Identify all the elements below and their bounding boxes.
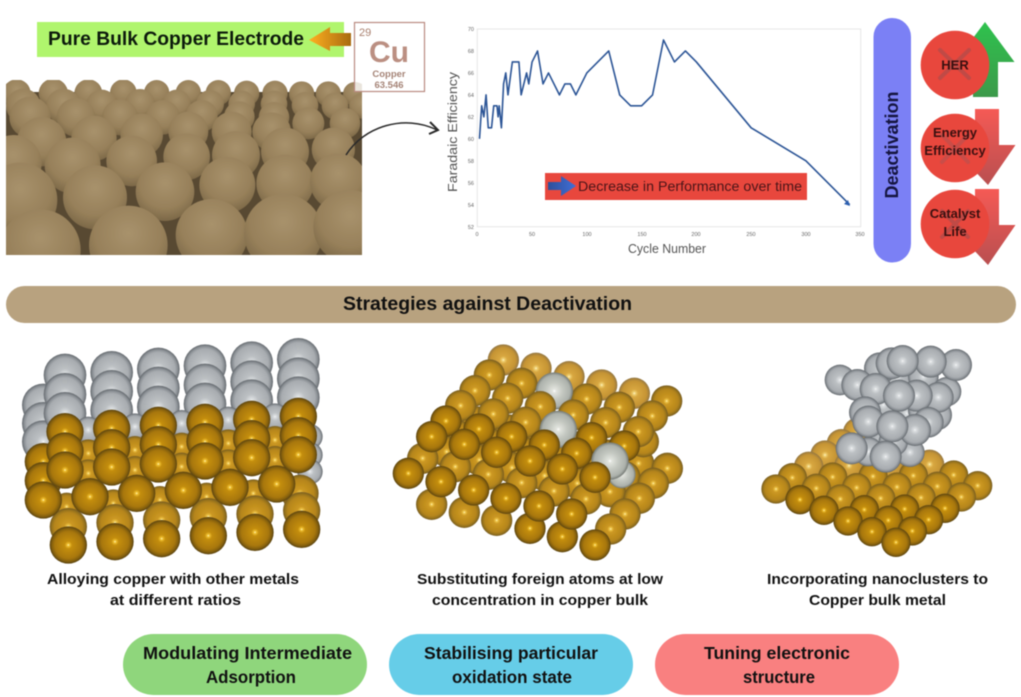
x axis title: Cycle Number <box>628 242 706 256</box>
caption: nanoclusters: Incorporating nanoclusters to <box>767 571 988 588</box>
banner: strategies against deactivation <box>6 286 1016 323</box>
caption: alloying: Alloying copper with other metals <box>47 571 299 588</box>
icon: catalyst life decreases: Life <box>943 224 967 239</box>
callout: decrease in performance <box>545 173 807 200</box>
y axis tick labels: 58 <box>468 159 474 165</box>
pill: tuning electronic structure: structure <box>743 667 815 687</box>
y axis tick labels <box>468 27 474 231</box>
pill: tuning electronic structure: Tuning electronic <box>704 643 850 663</box>
caption: substituting: concentration in copper bulk <box>432 592 649 609</box>
icon: copper periodic table tile: Cu <box>369 36 409 69</box>
x axis tick labels: 150 <box>637 232 647 238</box>
icon: HER increases: HER <box>941 58 969 72</box>
x axis tick labels <box>475 232 865 238</box>
y axis tick labels: 52 <box>468 225 474 231</box>
icon: catalyst life decreases <box>921 189 1016 265</box>
icon: energy efficiency decreases <box>921 109 1016 185</box>
caption: alloying <box>47 571 299 609</box>
icon: HER increases <box>921 22 1014 99</box>
chart: faradaic efficiency over cycle number <box>446 27 865 256</box>
y axis title: Faradaic Efficiency <box>446 71 460 192</box>
x axis tick labels: 250 <box>746 232 756 238</box>
illustration: substituted atoms in copper <box>393 344 683 561</box>
pill: modulating intermediate adsorption: Adsorption <box>206 667 296 687</box>
y axis tick labels: 60 <box>468 137 474 143</box>
illustration: nanocluster on copper <box>761 345 992 557</box>
pill: modulating intermediate adsorption <box>123 634 367 695</box>
heading: pure bulk copper electrode: Pure Bulk Copper Electrode <box>48 29 304 50</box>
icon: copper periodic table tile <box>354 22 424 92</box>
caption: alloying: at different ratios <box>110 592 241 609</box>
illustration: alloyed copper slab <box>22 338 323 564</box>
caption: substituting <box>417 571 663 609</box>
icon: catalyst life decreases: Catalyst <box>930 206 981 221</box>
arrow: electrode to chart <box>346 122 438 155</box>
x axis tick labels: 300 <box>801 232 811 238</box>
panel: deactivation label: Deactivation <box>882 92 902 198</box>
x axis tick labels: 200 <box>691 232 701 238</box>
pill: tuning electronic structure <box>655 634 899 695</box>
y axis tick labels: 56 <box>468 181 474 187</box>
y axis tick labels: 64 <box>468 93 474 99</box>
pill: stabilising oxidation state: oxidation state <box>452 667 572 687</box>
arrow: element to label <box>309 27 351 51</box>
caption: substituting: Substituting foreign atoms at low <box>417 571 663 588</box>
caption: nanoclusters <box>767 571 988 609</box>
banner: strategies against deactivation: Strategies against Deactivation <box>343 294 632 315</box>
x axis tick labels: 50 <box>529 232 535 238</box>
icon: copper periodic table tile: Copper <box>372 69 406 80</box>
x axis tick labels: 350 <box>855 232 865 238</box>
panel: bulk copper electrode image <box>5 79 363 256</box>
y axis tick labels: 62 <box>468 115 474 121</box>
y axis tick labels: 70 <box>468 27 474 33</box>
caption: nanoclusters: Copper bulk metal <box>809 592 946 609</box>
icon: energy efficiency decreases: Energy <box>933 125 978 140</box>
pill: stabilising oxidation state <box>389 634 633 695</box>
y axis tick labels: 66 <box>468 71 474 77</box>
y axis tick labels: 54 <box>468 203 474 209</box>
callout: decrease in performance: Decrease in Performance over time <box>578 179 802 194</box>
x axis tick labels: 100 <box>582 232 592 238</box>
icon: energy efficiency decreases: Efficiency <box>924 143 986 158</box>
pill: stabilising oxidation state: Stabilising particular <box>424 643 598 663</box>
y axis tick labels: 68 <box>468 49 474 55</box>
pill: modulating intermediate adsorption: Modulating Intermediate <box>143 643 352 663</box>
icon: blue arrow <box>548 176 576 196</box>
icon: copper periodic table tile: 29 <box>359 27 371 39</box>
x axis tick labels: 0 <box>475 232 479 238</box>
icon: copper periodic table tile: 63.546 <box>374 80 404 91</box>
data line <box>479 40 850 205</box>
data line end arrowhead <box>844 200 850 206</box>
heading: pure bulk copper electrode <box>37 22 344 57</box>
panel: deactivation label <box>874 18 911 262</box>
